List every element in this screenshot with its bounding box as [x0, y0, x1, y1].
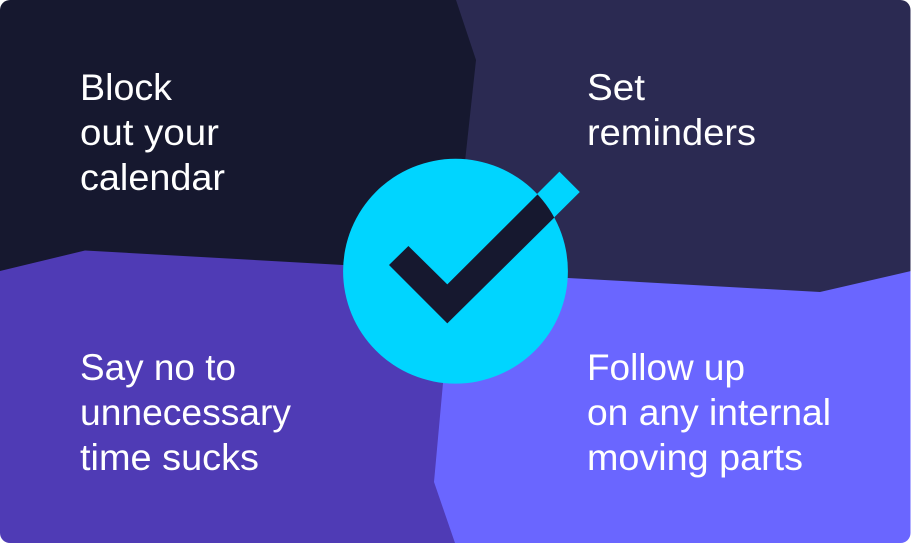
heading: follow up on any internal moving parts: on any internal [587, 392, 831, 433]
icon: check mark badge [343, 159, 580, 384]
heading: follow up on any internal moving parts [587, 347, 831, 478]
check mark [389, 194, 554, 324]
heading: set reminders: Set [587, 67, 646, 108]
heading: follow up on any internal moving parts: moving parts [587, 437, 803, 478]
panel: bottom right [434, 271, 911, 543]
heading: say no to unnecessary time sucks: time sucks [80, 437, 259, 478]
panel: top right [440, 0, 911, 300]
heading: block out your calendar: out your [80, 112, 219, 153]
heading: follow up on any internal moving parts: Follow up [587, 347, 745, 388]
heading: block out your calendar: Block [80, 67, 173, 108]
heading: say no to unnecessary time sucks [80, 347, 291, 478]
heading: block out your calendar [80, 67, 225, 198]
heading: say no to unnecessary time sucks: unnecessary [80, 392, 291, 433]
heading: set reminders [587, 67, 756, 153]
heading: block out your calendar: calendar [80, 157, 225, 198]
panel: top left [0, 0, 476, 300]
check tip outside circle [537, 172, 580, 218]
circle [343, 159, 568, 384]
panel: bottom left [0, 250, 460, 543]
heading: set reminders: reminders [587, 112, 756, 153]
heading: say no to unnecessary time sucks: Say no to [80, 347, 236, 388]
